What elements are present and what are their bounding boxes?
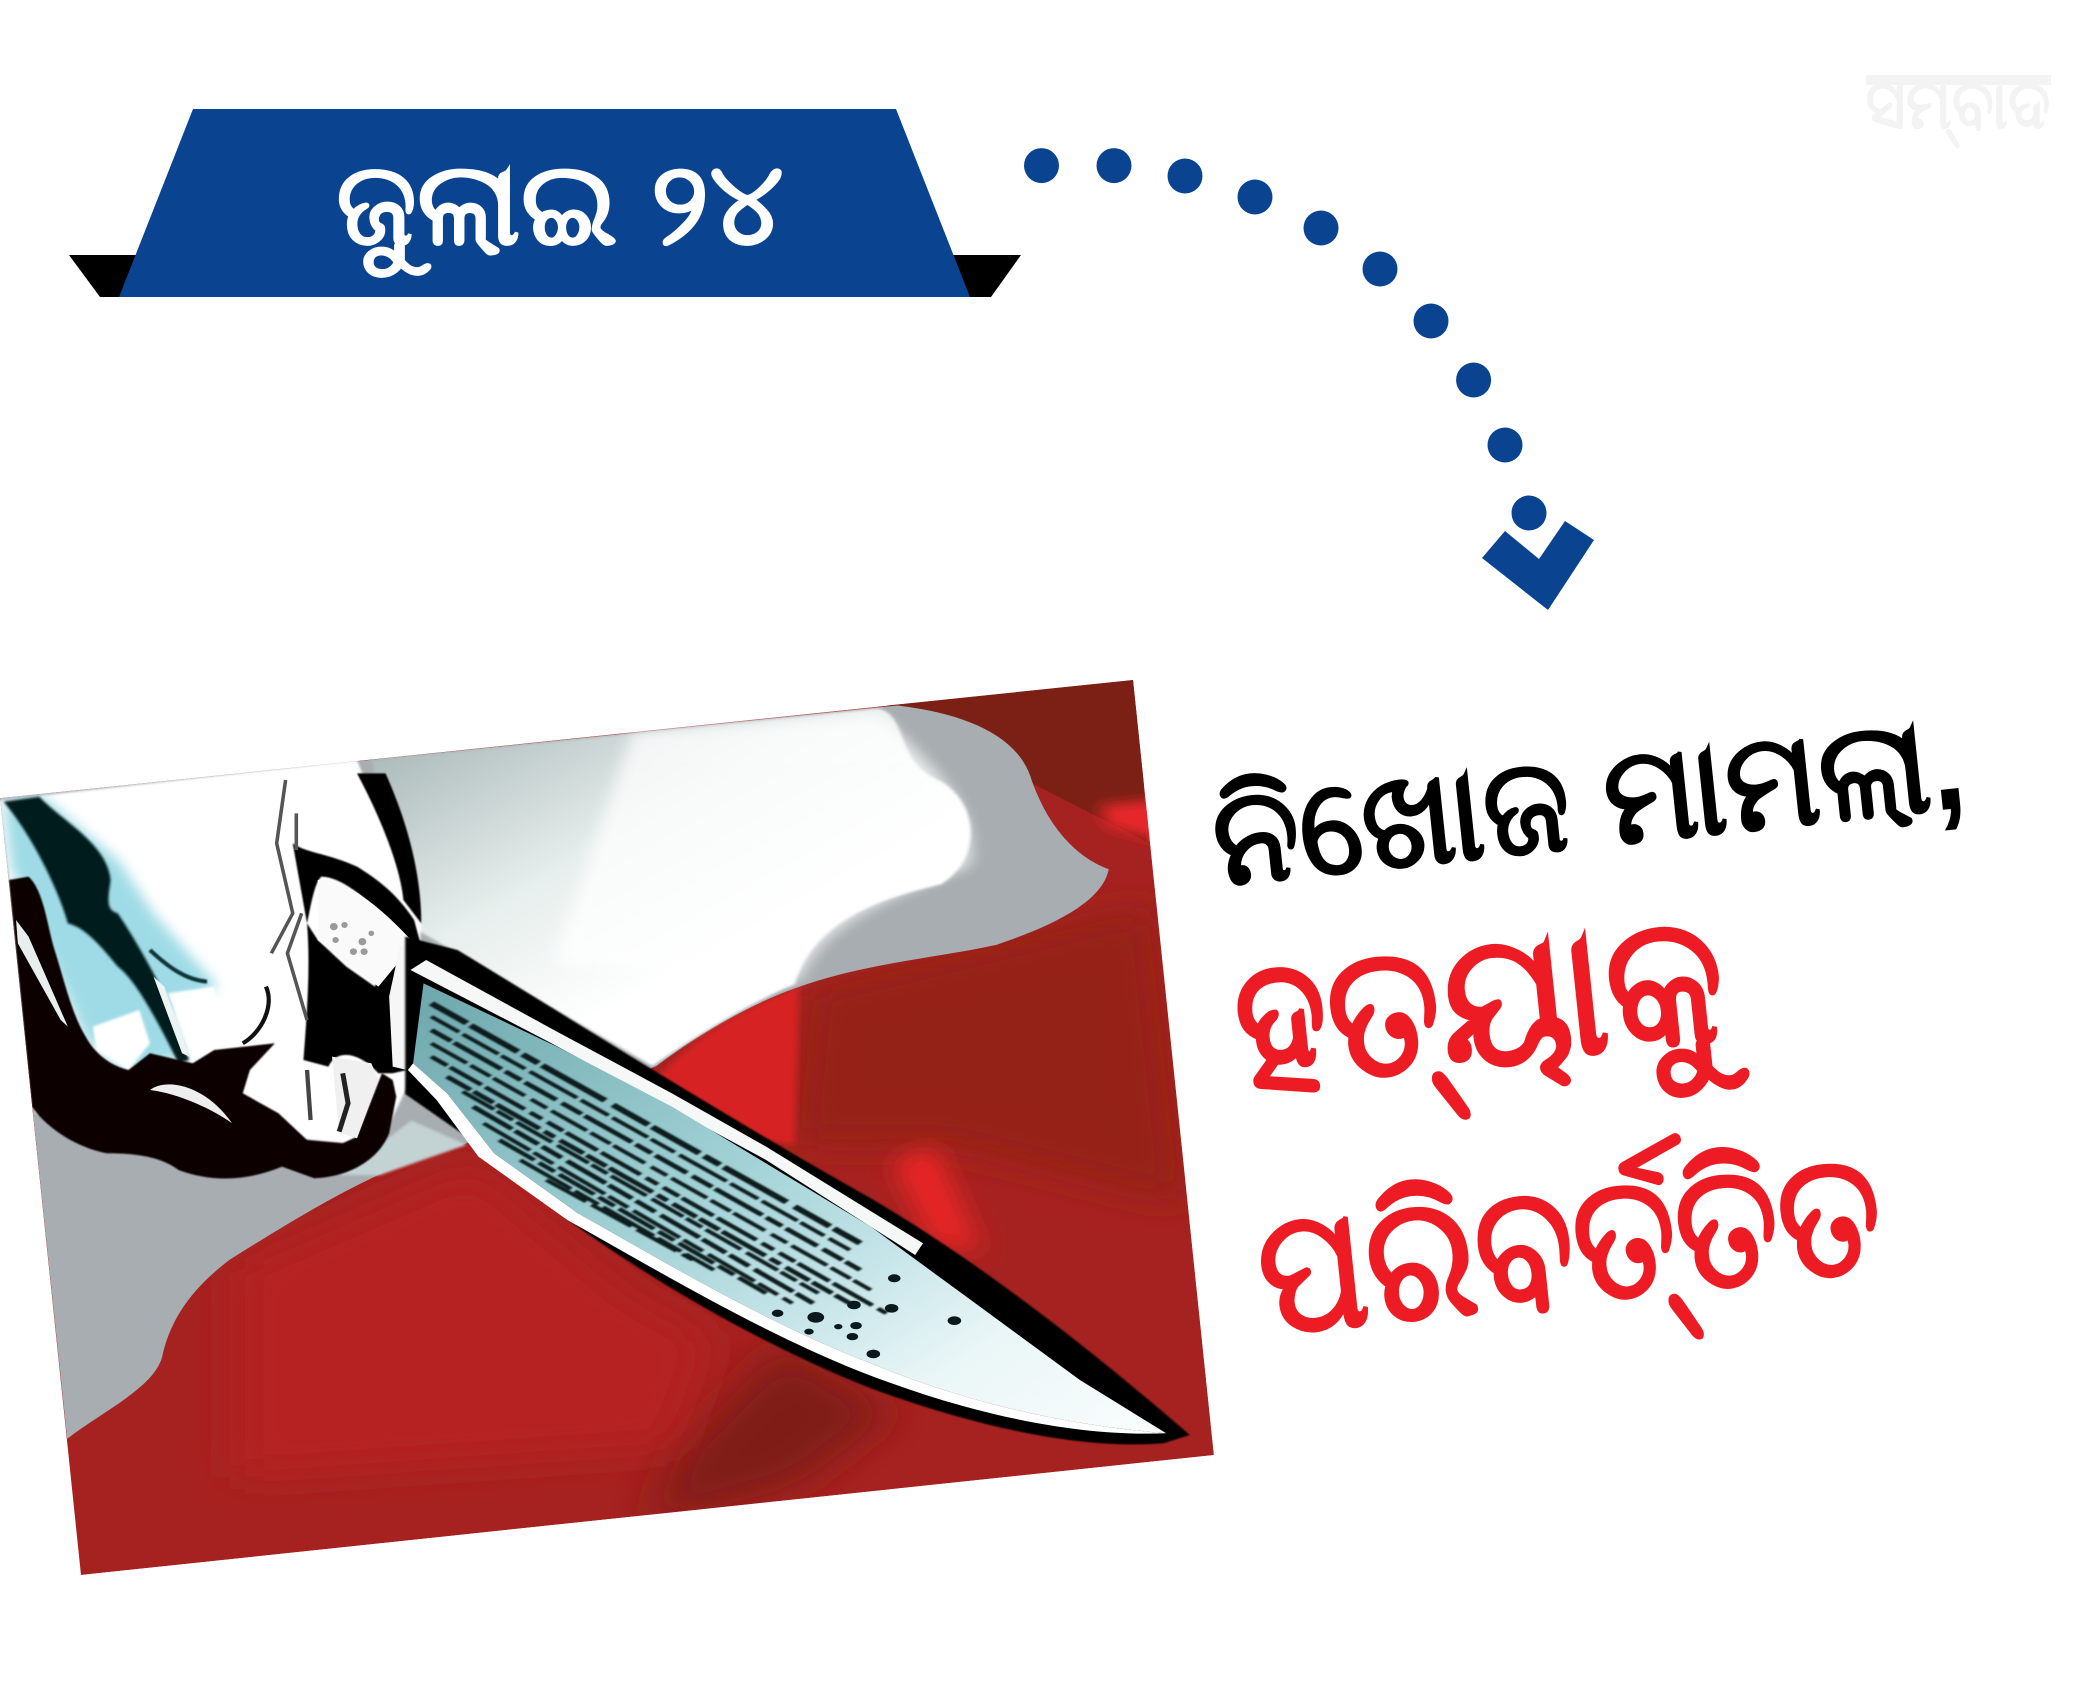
banner ribbon folds	[69, 255, 1021, 297]
headline line 1: ନିଖୋଜ ମାମଲା,	[1205, 687, 1972, 915]
headline line 3: ପରିବର୍ତ୍ତିତ	[1248, 1112, 1892, 1385]
banner date text: ଜୁଲାଇ ୨୪	[336, 139, 784, 279]
knife blade	[405, 937, 1190, 1444]
knife illustration	[0, 678, 1214, 1575]
watermark logo: ସମ୍ବାଦ	[1866, 65, 2050, 150]
dotted curved arrow	[1024, 148, 1594, 610]
red and grey backdrop	[0, 678, 1214, 1575]
headline line 2: ହତ୍ୟାକୁ	[1225, 874, 1752, 1143]
blade hatching	[431, 1003, 886, 1313]
hand gripping the knife	[0, 760, 421, 1178]
headline	[1205, 687, 1972, 1385]
banner trapezoid	[119, 109, 970, 297]
date banner	[69, 109, 1021, 297]
